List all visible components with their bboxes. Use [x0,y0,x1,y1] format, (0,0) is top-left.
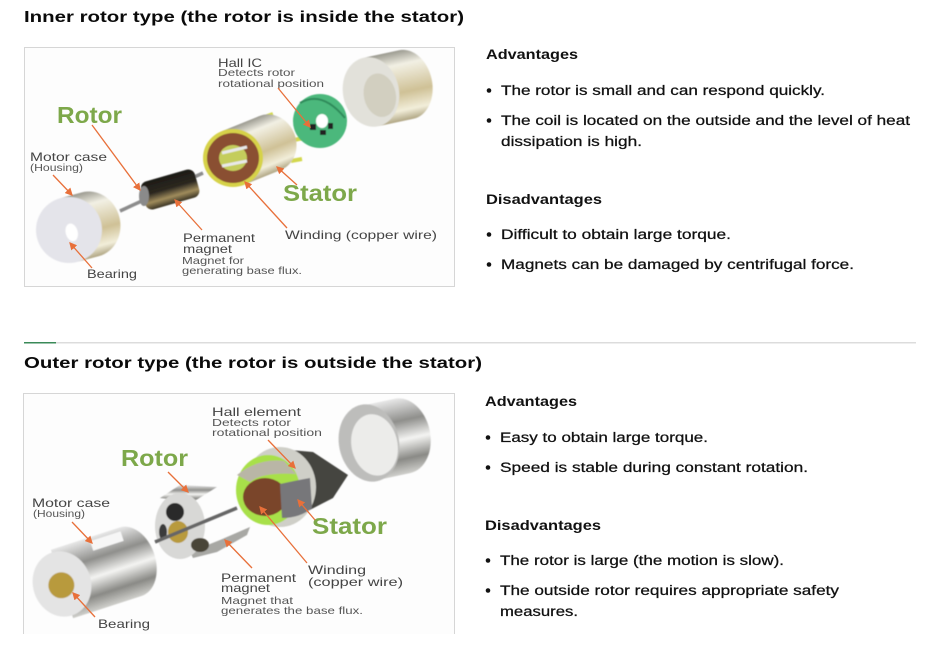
text: outer advantages: Easy to obtain large torque. [500,430,708,445]
heading: inner rotor type: Inner rotor type (the rotor is inside the stator) [24,9,464,26]
text: inner labels: generating base flux. [182,265,302,277]
text: inner labels: Detects rotor [218,67,296,79]
text: outer labels: Stator [312,513,387,539]
icon: inner motor case [29,185,128,270]
text: outer disadvantages: The outside rotor requires appropriate safety [500,583,839,598]
text: outer labels: magnet [221,581,271,595]
icon: inner stator [203,106,305,187]
arrows: inner callouts [53,88,310,268]
text: inner disadvantages [486,192,854,272]
heading: outer rotor type: Outer rotor type (the rotor is outside the stator) [24,355,482,372]
text: inner labels: (Housing) [30,162,83,174]
text: inner advantages: The coil is located on the outside and the level of heat [501,113,910,128]
text: outer advantages: Speed is stable during constant rotation. [500,460,808,475]
text: outer disadvantages: The rotor is large (the motion is slow). [500,553,784,568]
text: inner disadvantages: Disadvantages [486,192,602,207]
panel: inner rotor diagram [24,45,454,286]
text: inner disadvantages: Difficult to obtain large torque. [501,227,731,242]
text: outer disadvantages: measures. [500,604,578,619]
text: inner labels: Motor case [30,150,107,164]
text: inner labels: magnet [183,242,233,256]
text: inner advantages: Advantages [486,47,578,62]
text: inner advantages: dissipation is high. [501,134,642,149]
panel: outer rotor diagram [23,392,455,634]
text: outer labels: (copper wire) [308,575,403,589]
text: inner labels: Winding (copper wire) [285,228,437,242]
icon: inner rotor [120,168,203,211]
text: outer labels: Bearing [98,617,150,631]
text: outer advantages: Advantages [485,394,577,409]
text: outer advantages [485,394,808,475]
text: outer labels: (Housing) [33,508,85,520]
text: outer labels: generates the base flux. [221,605,363,617]
text: outer disadvantages [485,518,839,619]
text: inner labels: Hall IC [218,56,262,70]
icon: outer rotor [155,485,250,559]
text: inner labels: Rotor [57,102,122,128]
text: outer labels: rotational position [212,427,322,439]
icon: outer motor case [23,520,165,627]
text: outer labels: Permanent [221,571,297,585]
text: outer labels: Winding [308,563,366,577]
text: inner disadvantages: Magnets can be damaged by centrifugal force. [501,257,854,272]
text: inner advantages [486,47,910,149]
text: outer labels: Detects rotor [212,417,292,429]
text: outer labels [32,405,403,631]
text: outer labels: Motor case [32,496,110,510]
text: inner labels: Stator [283,180,357,206]
icon: inner end cap [336,45,439,132]
icon: outer end cap [332,392,438,487]
icon: inner circuit board [293,94,347,148]
text: inner labels: rotational position [218,78,324,90]
text: inner labels [30,56,437,281]
arrows: outer callouts [72,440,315,617]
icon: outer stator [236,447,348,527]
text: outer labels: Rotor [121,445,188,471]
text: outer labels: Hall element [212,405,302,419]
text: inner labels: Bearing [87,267,137,281]
text: inner advantages: The rotor is small and can respond quickly. [501,83,825,98]
text: inner labels: Magnet for [182,255,245,267]
text: outer disadvantages: Disadvantages [485,518,601,533]
text: outer labels: Magnet that [221,595,293,607]
text: inner labels: Permanent [183,231,256,245]
